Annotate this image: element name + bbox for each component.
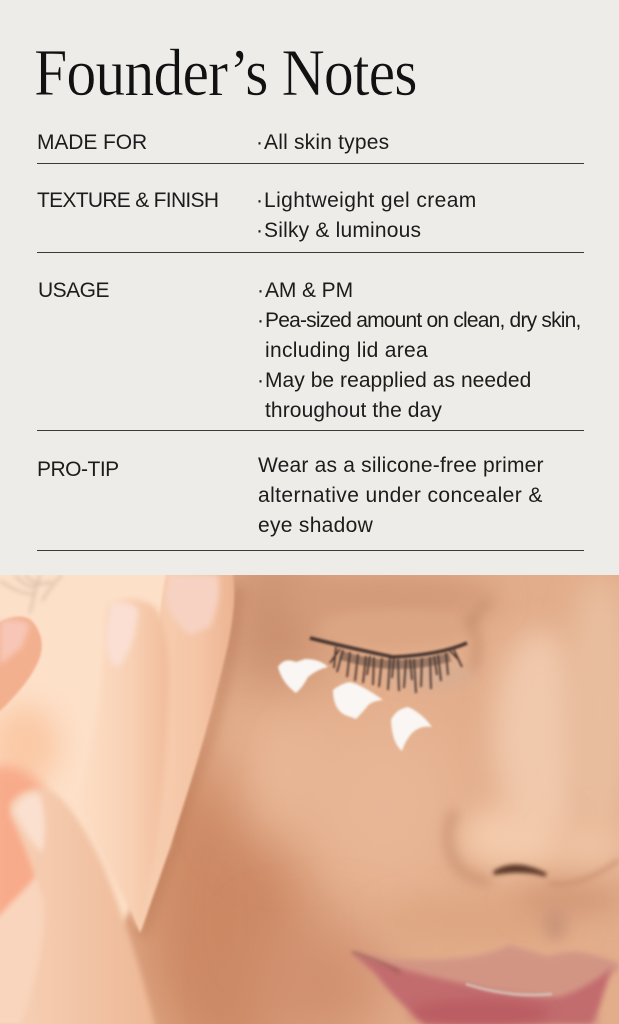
cream dab 3 <box>391 707 432 751</box>
row value: pro-tip <box>258 454 544 537</box>
title: Founder’s Notes <box>34 36 417 110</box>
fingers <box>0 570 234 1024</box>
row value: texture and finish <box>258 189 477 242</box>
row value: usage: AM & PM <box>265 279 353 302</box>
finger: pink back finger <box>0 766 45 930</box>
face shading <box>140 545 619 1024</box>
row value: pro-tip: Wear as a silicone-free primer <box>258 454 544 477</box>
cheek shadow along fingers <box>142 585 238 935</box>
row value: made for: All skin types <box>264 131 389 154</box>
nose outline and nostril <box>448 810 619 884</box>
row value: pro-tip: alternative under concealer & <box>258 484 543 507</box>
row value: usage <box>260 279 581 422</box>
lips <box>350 945 619 1024</box>
row value: texture and finish: Lightweight gel cream <box>264 189 477 212</box>
row label: made for: MADE FOR <box>37 131 147 154</box>
eyelashes <box>310 638 467 693</box>
row value: pro-tip: eye shadow <box>258 514 373 537</box>
finger: index <box>118 570 234 933</box>
row value: texture and finish: Silky & luminous <box>264 219 421 242</box>
cream dab 2 <box>333 682 383 719</box>
finger: upper left <box>0 617 42 720</box>
row label: texture and finish: TEXTURE & FINISH <box>37 189 218 212</box>
row value: usage: including lid area <box>265 339 428 362</box>
row value: usage: Pea-sized amount on clean, dry skin, <box>265 309 581 332</box>
row label: usage: USAGE <box>38 279 109 302</box>
eyelid and socket <box>280 571 500 689</box>
row label: pro-tip: PRO-TIP <box>37 458 119 481</box>
background behind hand <box>0 565 180 1024</box>
photo: woman applying eye cream <box>0 575 619 1024</box>
finger: front <box>10 788 156 1024</box>
hair wisps <box>0 575 62 613</box>
wrist area <box>0 871 60 1024</box>
row value: usage: May be reapplied as needed <box>265 369 531 392</box>
cream dab 1 <box>278 659 328 693</box>
fingernails <box>0 575 219 667</box>
finger: middle <box>75 598 169 930</box>
cream dabs <box>278 659 432 751</box>
row value: usage: throughout the day <box>265 399 442 422</box>
